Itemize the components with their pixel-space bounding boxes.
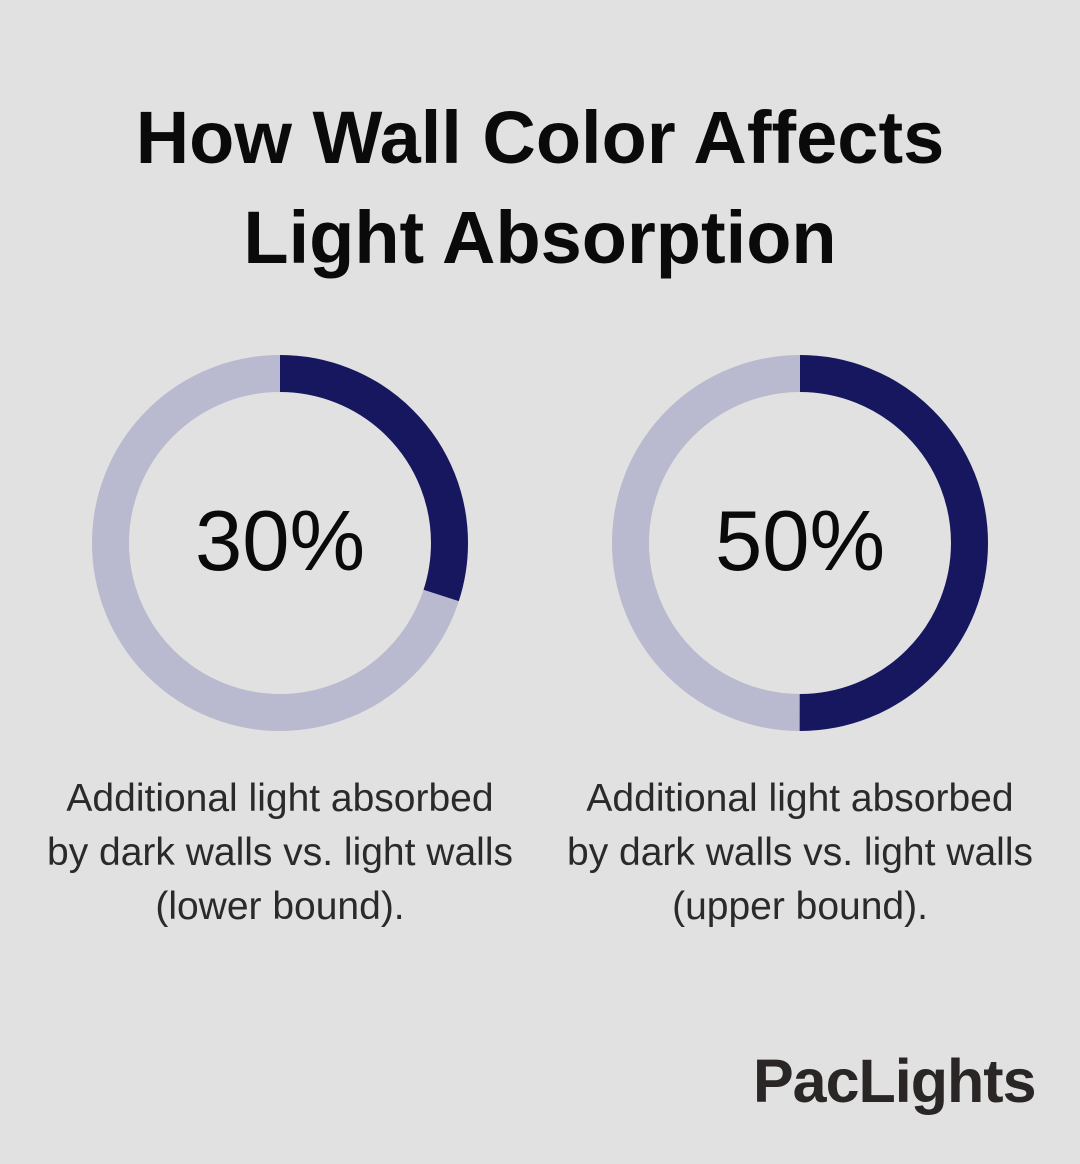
logo: PacLights — [753, 1047, 1036, 1115]
donut: 50% — [630, 374, 970, 712]
description: lower bound — [47, 777, 513, 928]
description: lower bound: (lower bound). — [155, 885, 405, 928]
description: lower bound: Additional light absorbed — [66, 777, 494, 820]
donut: 30%: 30% — [195, 494, 365, 589]
donut: 50%: 50% — [715, 494, 885, 589]
title: How Wall Color Affects — [136, 96, 944, 179]
description: upper bound — [567, 777, 1033, 928]
description: upper bound: Additional light absorbed — [586, 777, 1014, 820]
donut: 30% — [110, 374, 450, 712]
title — [136, 96, 944, 279]
description: lower bound: by dark walls vs. light walls — [47, 831, 513, 874]
description: upper bound: by dark walls vs. light walls — [567, 831, 1033, 874]
title: Light Absorption — [243, 196, 837, 279]
description: upper bound: (upper bound). — [672, 885, 928, 928]
